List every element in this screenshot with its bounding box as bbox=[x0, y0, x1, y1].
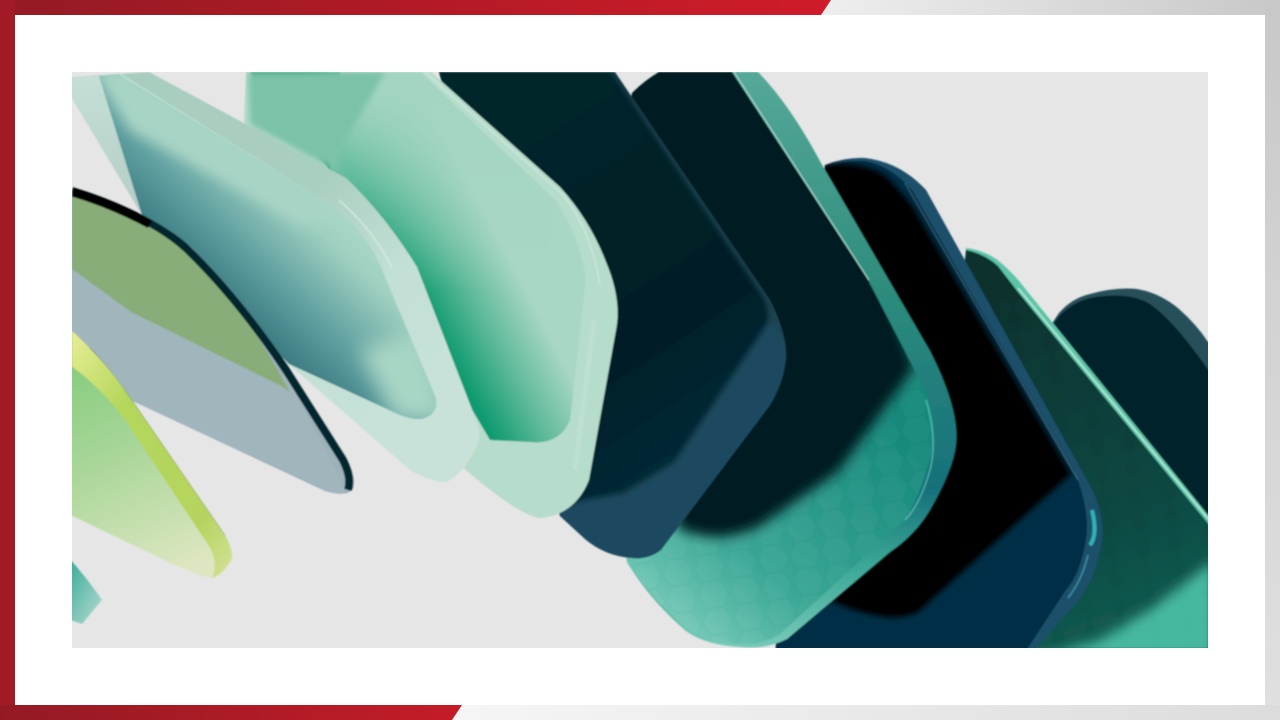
dark upper zone bbox=[430, 60, 768, 510]
dark upper zone bbox=[630, 72, 918, 546]
frame: grey right bar bbox=[1265, 0, 1280, 720]
lower navy zone bbox=[560, 316, 786, 558]
frame: grey top bar bbox=[800, 0, 1280, 15]
glass pane 6: dark with teal hexagon base bbox=[626, 72, 958, 648]
glass panes group bbox=[60, 50, 1225, 665]
glass pane 2: green and blue-grey bbox=[60, 186, 354, 500]
glass bright edge bbox=[425, 72, 600, 285]
frame: red top bar bbox=[0, 0, 831, 15]
glass pane 8: teal green bbox=[964, 247, 1208, 648]
glass pane 5: dark navy bbox=[430, 60, 800, 570]
soft lower right highlight bbox=[360, 330, 450, 420]
teal glow on pane 8 bbox=[1046, 555, 1208, 648]
inner blue-teal sheet bbox=[99, 74, 436, 419]
photo panel bbox=[60, 50, 1225, 665]
frame: red bottom bar bbox=[0, 705, 462, 720]
yellow rim bbox=[72, 330, 232, 578]
glass pane 7: black and navy bbox=[760, 158, 1102, 660]
frame: grey bottom bar bbox=[440, 705, 1280, 720]
glass pane 4: pale and saturated green bbox=[244, 72, 618, 518]
left pale rim bbox=[72, 76, 140, 216]
top lightening bbox=[330, 72, 471, 279]
glass pane 0: small teal fragment bbox=[72, 560, 102, 624]
dark curved edge bbox=[72, 191, 349, 490]
glass pane 3: pale blue-teal bbox=[60, 70, 479, 482]
upper green sheet bbox=[250, 72, 586, 442]
top soft green bbox=[248, 72, 385, 172]
teal lower zone bbox=[626, 340, 934, 644]
glass pane 1: lime green bbox=[60, 320, 232, 578]
photo background bbox=[72, 72, 1208, 648]
black core of pane 7 bbox=[824, 160, 1074, 620]
blue-grey lower area bbox=[288, 378, 300, 396]
green upper area bbox=[60, 190, 290, 392]
frame: red left bar bbox=[0, 0, 15, 720]
soft top highlight bbox=[100, 74, 306, 224]
glass pane 9: far right dark bbox=[1052, 288, 1208, 516]
